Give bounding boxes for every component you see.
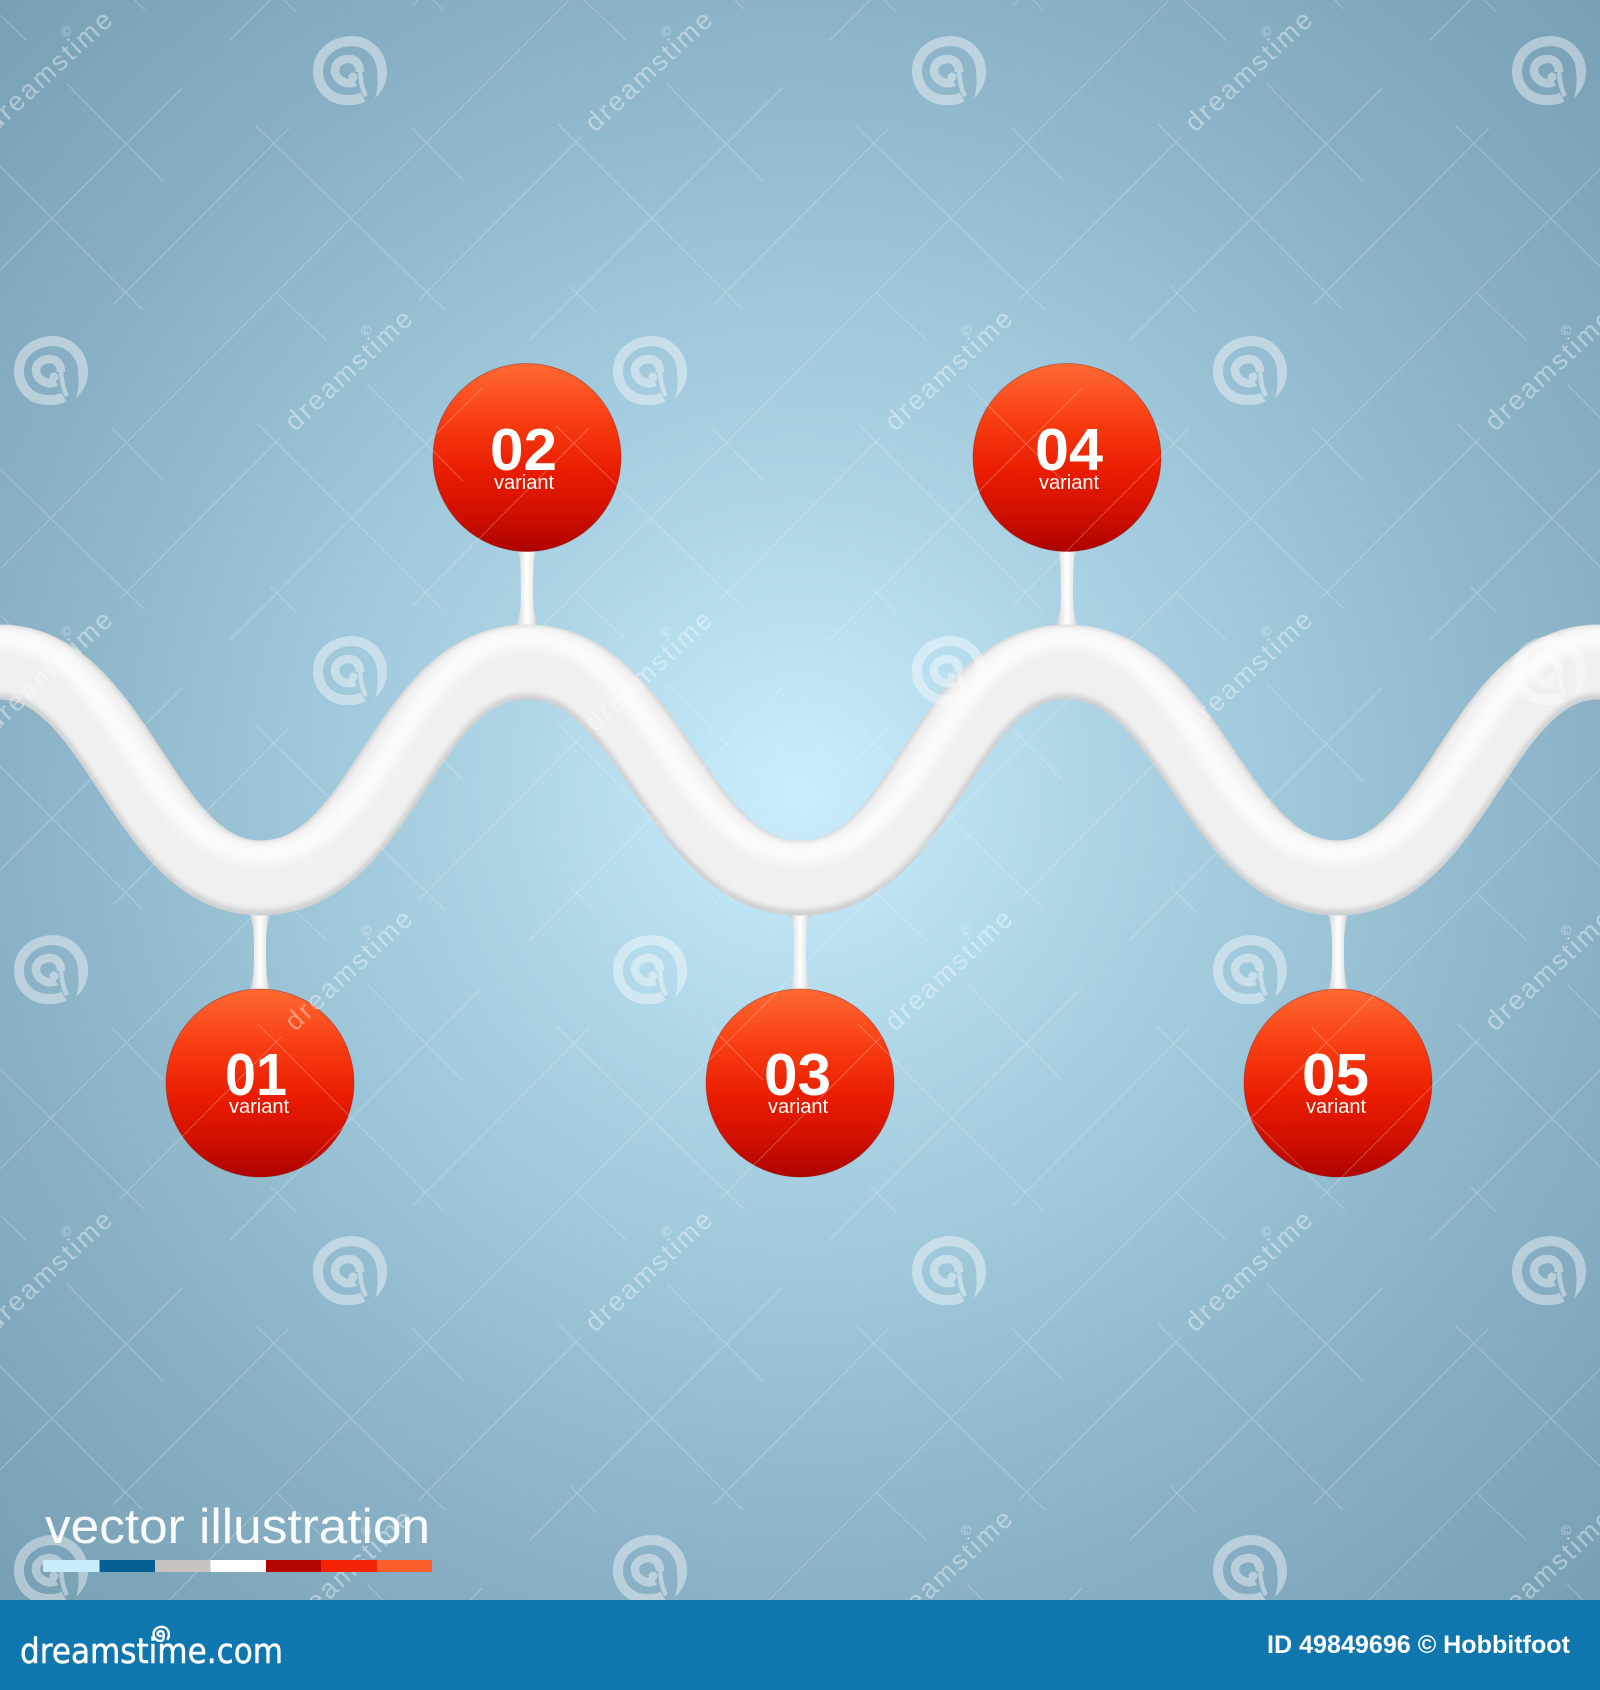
watermark text: dreamstime bbox=[1179, 603, 1320, 738]
colour strip bbox=[43, 1560, 432, 1572]
white wavy tube bbox=[0, 638, 1600, 878]
footer band bbox=[0, 1600, 1600, 1690]
watermark text: dreamstime bbox=[279, 302, 420, 437]
watermark copyright marks: © bbox=[1261, 1223, 1272, 1239]
watermark text: dreamstime bbox=[1179, 1203, 1320, 1338]
watermark copyright marks: © bbox=[1561, 1522, 1572, 1538]
footer logo: dreamstime.com bbox=[20, 1632, 283, 1672]
watermark text: dreamstime bbox=[279, 902, 420, 1037]
connector stems bbox=[248, 549, 1350, 992]
watermark text: dreamstime bbox=[579, 1203, 720, 1338]
circle 01: 01 bbox=[225, 1042, 287, 1108]
watermark copyright marks: © bbox=[961, 922, 972, 938]
circle 04: variant bbox=[1039, 472, 1099, 494]
watermark text: dreamstime bbox=[879, 302, 1020, 437]
circle 03: 03 bbox=[764, 1042, 831, 1108]
image id and author: ID 49849696 © Hobbitfoot bbox=[1267, 1631, 1571, 1659]
circle 02: 02 bbox=[490, 417, 557, 483]
watermark text: dreamstime bbox=[1179, 3, 1320, 138]
circle 05: variant bbox=[1306, 1096, 1366, 1118]
watermark copyright marks: © bbox=[361, 1522, 372, 1538]
circle 04 bbox=[973, 364, 1161, 552]
watermark copyright marks: © bbox=[961, 1522, 972, 1538]
watermark copyright marks: © bbox=[661, 623, 672, 639]
circle 01: variant bbox=[229, 1096, 289, 1118]
watermark text: dreamstime bbox=[879, 1502, 1020, 1637]
circle 01 bbox=[166, 989, 354, 1177]
watermark text: dreamstime bbox=[579, 603, 720, 738]
watermark copyright marks: © bbox=[1261, 623, 1272, 639]
watermark copyright marks: © bbox=[1261, 23, 1272, 39]
watermark copyright marks: © bbox=[61, 623, 72, 639]
vector illustration caption: vector illustration bbox=[45, 1500, 430, 1554]
watermark copyright marks: © bbox=[361, 922, 372, 938]
circle 02 bbox=[433, 364, 621, 552]
watermark copyright marks: © bbox=[961, 322, 972, 338]
watermark copyright marks: © bbox=[661, 1223, 672, 1239]
watermark copyright marks: © bbox=[61, 23, 72, 39]
watermark copyright marks: © bbox=[1561, 322, 1572, 338]
watermark text: dreamstime bbox=[579, 3, 720, 138]
watermark copyright marks: © bbox=[61, 1223, 72, 1239]
watermark copyright marks: © bbox=[361, 322, 372, 338]
circle 04: 04 bbox=[1035, 417, 1103, 483]
watermark copyright marks: © bbox=[661, 23, 672, 39]
circle 05: 05 bbox=[1302, 1042, 1369, 1108]
circle 03 bbox=[706, 989, 894, 1177]
watermark copyright marks: © bbox=[1561, 922, 1572, 938]
circle 02: variant bbox=[494, 472, 554, 494]
circle 03: variant bbox=[768, 1096, 828, 1118]
watermark text: dreamstime bbox=[279, 1502, 420, 1637]
circle 05 bbox=[1244, 989, 1432, 1177]
watermark text: dreamstime bbox=[879, 902, 1020, 1037]
